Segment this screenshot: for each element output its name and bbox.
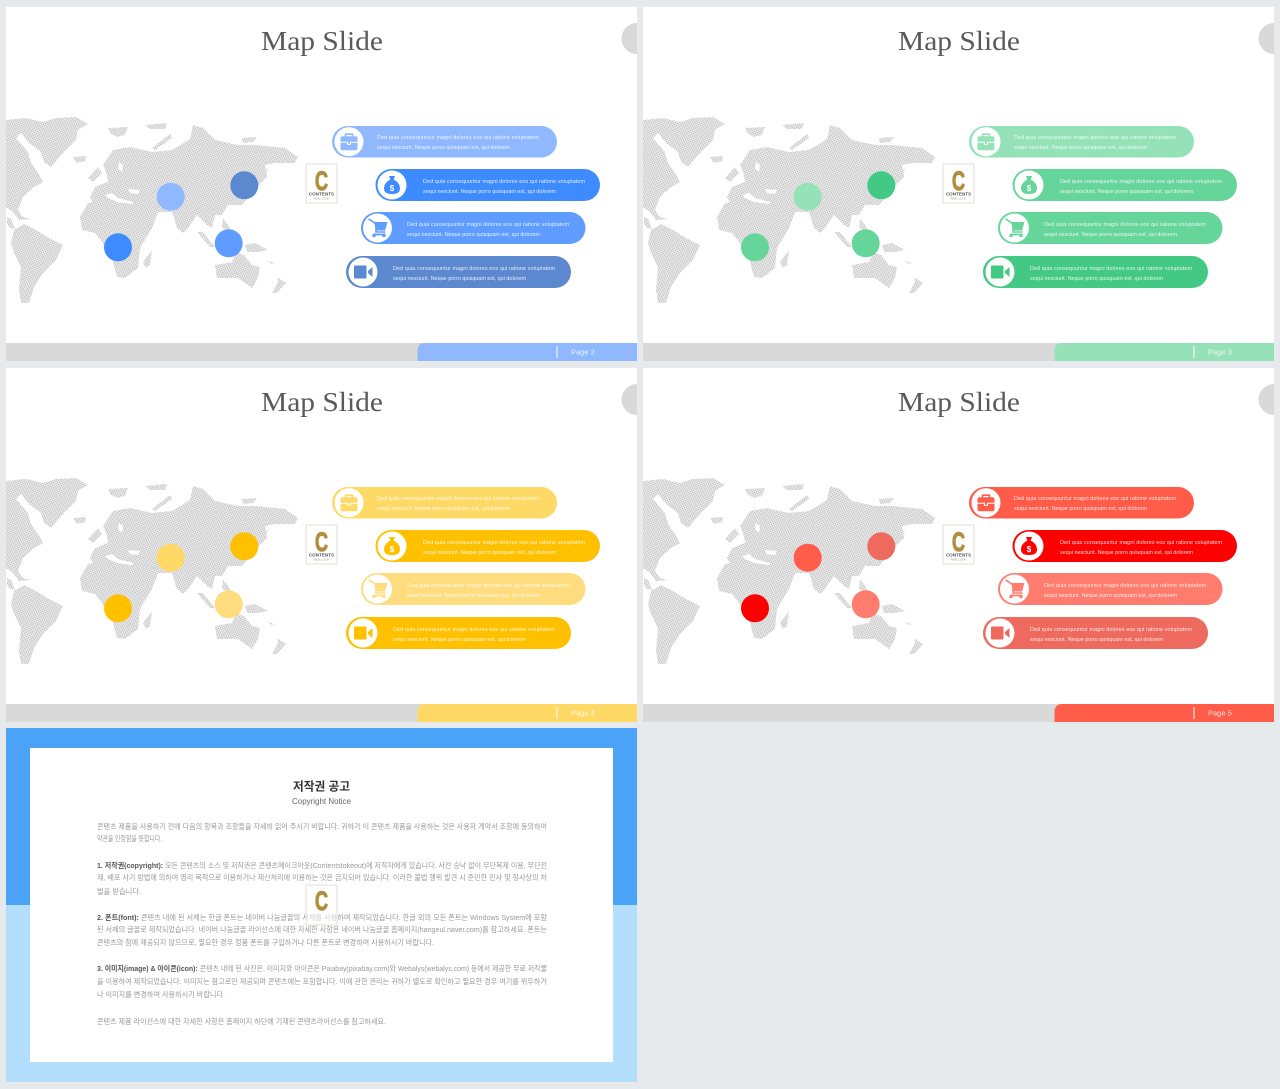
map markers — [741, 171, 895, 261]
font paragraph: 2. 폰트(font): 콘텐츠 내에 된 서체는 한글 폰트는 네이버 나눔글꼴의 서체를 사용하여 제작되었습니다. 한글 외의 모든 폰트는 Windows System에 포함 — [97, 912, 547, 922]
pill: cart — [998, 573, 1222, 605]
dotted world map — [6, 117, 298, 303]
pill: money bag: sequi nesciunt. Neque porro quisquam est, qui dolorem — [423, 550, 556, 556]
title: Map Slide — [898, 25, 1020, 56]
pill: cart — [361, 573, 586, 605]
pill: money bag: Ded quia consequuntur magni dolores eos qui ratione voluptatem — [423, 179, 586, 185]
logo — [943, 525, 974, 564]
logo: REAL LOOK — [951, 196, 967, 200]
pill: video camera: Ded quia consequuntur magni dolores eos qui ratione voluptatem — [393, 266, 556, 272]
pill: briefcase — [332, 487, 557, 518]
map markers — [104, 171, 258, 261]
intro paragraph — [97, 821, 547, 843]
pill: money bag: sequi nesciunt. Neque porro quisquam est, qui dolorem — [423, 189, 556, 195]
pill: briefcase: Ded quia consequuntur magni dolores eos qui ratione voluptatem — [1014, 135, 1176, 141]
pill: cart — [361, 212, 586, 244]
pill: cart: sequi nesciunt. Neque porro quisquam est, qui dolorem — [407, 232, 540, 238]
font paragraph: 된 서체의 글꼴로 제작되었습니다. 네이버 나눔글꼴 라이선스에 대한 자세한 사항은 네이버 나눔글꼴 홈페이지(hangeul.naver.com)를 참고하세요. 폰트는 — [97, 924, 547, 934]
dotted world map — [643, 117, 935, 303]
pill: money bag — [1012, 530, 1237, 562]
image paragraph: 을 이용하여 제작되었습니다. 이미지는 참고로만 제공되며 콘텐츠에는 포함합니다. 이에 관한 권리는 귀하가 별도로 확인하고 필요한 경우 여기를 위두하거 — [97, 976, 547, 986]
pill: money bag: $ — [390, 184, 395, 193]
pill: briefcase: sequi nesciunt. Neque porro quisquam est, qui dolorem — [377, 145, 510, 151]
copyright paragraph: 제, 배포 사기 방법에 의하여 영리 목적으로 이용하거나 재산처리에 이용하는 것은 금지되어 있습니다. 이러한 불법 행위 발견 시 준민한 민사 및 형사상의 처 — [97, 872, 547, 882]
pill: briefcase: Ded quia consequuntur magni dolores eos qui ratione voluptatem — [1014, 496, 1176, 502]
panel: copyright notice — [6, 728, 637, 1082]
pill: video camera — [983, 256, 1208, 288]
pill: money bag — [376, 169, 600, 201]
pill: video camera — [983, 617, 1208, 649]
pill: briefcase — [332, 126, 557, 158]
title: Map Slide — [261, 386, 383, 417]
footer bar: Page 4 — [571, 708, 595, 718]
pill: video camera: sequi nesciunt. Neque porro quisquam est, qui dolorem — [393, 637, 526, 643]
logo: REAL LOOK — [314, 196, 330, 200]
font paragraph — [97, 912, 547, 947]
watermark logo: C — [315, 886, 328, 916]
panel: green map slide — [643, 7, 1274, 361]
title: Map Slide — [261, 25, 383, 56]
corner tab — [1258, 384, 1274, 415]
pill: video camera: sequi nesciunt. Neque porro quisquam est, qui dolorem — [1030, 276, 1164, 282]
copyright paragraph: 1. 저작권(copyright): 모든 콘텐츠의 소스 및 저작권은 콘텐츠메이크아웃(Contentstokeout)에 저작자에게 있습니다. 사전 승낙 없이 무단복제 이용, 무단전 — [97, 860, 547, 870]
pill: video camera — [346, 617, 571, 649]
corner tab — [621, 23, 637, 54]
map markers — [741, 532, 895, 622]
logo — [306, 164, 337, 203]
pill: briefcase — [969, 126, 1194, 158]
map markers — [104, 532, 258, 622]
logo — [306, 525, 337, 564]
copyright paragraph — [97, 860, 547, 896]
pill: cart: sequi nesciunt. Neque porro quisquam est, qui dolorem — [407, 593, 540, 599]
notice subheading: Copyright Notice — [292, 796, 351, 806]
watermark logo — [306, 885, 337, 925]
pill: video camera: Ded quia consequuntur magni dolores eos qui ratione voluptatem — [1030, 266, 1192, 272]
footer bar — [6, 704, 637, 722]
pill: briefcase: sequi nesciunt. Neque porro quisquam est, qui dolorem — [1014, 145, 1148, 151]
pill: video camera: sequi nesciunt. Neque porro quisquam est, qui dolorem — [393, 276, 526, 282]
logo: C — [315, 166, 328, 196]
corner tab — [621, 384, 637, 415]
pill: money bag: Ded quia consequuntur magni dolores eos qui ratione voluptatem — [423, 540, 586, 546]
pill: cart — [998, 212, 1222, 244]
logo: REAL LOOK — [951, 558, 967, 562]
panel: yellow map slide — [6, 368, 637, 722]
logo: CONTENTS — [946, 552, 971, 558]
pill: video camera: sequi nesciunt. Neque porro quisquam est, qui dolorem — [1030, 637, 1164, 643]
pill: video camera: Ded quia consequuntur magni dolores eos qui ratione voluptatem — [393, 627, 556, 633]
footer bar: Page 3 — [1208, 348, 1232, 356]
pill: money bag: $ — [1027, 545, 1032, 554]
pill: briefcase: Ded quia consequuntur magni dolores eos qui ratione voluptatem — [377, 135, 540, 141]
notice heading: 저작권 공고 — [293, 778, 350, 794]
panel: blue map slide — [6, 7, 637, 361]
pill: cart: Ded quia consequuntur magni dolores eos qui ratione voluptatem — [1044, 222, 1206, 228]
footer bar — [6, 343, 637, 361]
pill: video camera — [346, 256, 571, 288]
copyright paragraph: 벌을 받습니다. — [97, 886, 141, 896]
logo: CONTENTS — [309, 552, 334, 558]
image paragraph — [97, 963, 547, 999]
pill: cart: Ded quia consequuntur magni dolores eos qui ratione voluptatem — [1044, 583, 1206, 589]
pill: money bag — [1012, 169, 1237, 201]
logo: CONTENTS — [946, 192, 971, 196]
logo: C — [315, 527, 328, 557]
pill: cart: sequi nesciunt. Neque porro quisquam est, qui dolorem — [1044, 593, 1178, 599]
pill: cart: Ded quia consequuntur magni dolores eos qui ratione voluptatem — [407, 222, 570, 228]
font paragraph: 콘텐츠의 첨에 제공되지 않으므로, 필요한 경우 정품 폰트를 구입하거나 다른 폰트로 변경하여 사용하시기 바랍니다. — [97, 937, 434, 947]
pill: video camera: Ded quia consequuntur magni dolores eos qui ratione voluptatem — [1030, 627, 1192, 633]
logo: REAL LOOK — [314, 558, 330, 562]
dotted world map — [6, 478, 298, 664]
pill: money bag: $ — [1027, 184, 1032, 193]
footer bar — [643, 343, 1274, 361]
footer bar: Page 5 — [1208, 708, 1232, 718]
logo — [943, 164, 974, 203]
pill: money bag: Ded quia consequuntur magni dolores eos qui ratione voluptatem — [1060, 540, 1222, 546]
pill: money bag: sequi nesciunt. Neque porro quisquam est, qui dolorem — [1060, 550, 1194, 556]
logo: C — [952, 527, 965, 557]
footer bar — [643, 704, 1274, 722]
pill: money bag: Ded quia consequuntur magni dolores eos qui ratione voluptatem — [1060, 179, 1222, 185]
pill: money bag — [376, 530, 600, 562]
panel: red map slide — [643, 368, 1274, 722]
pill: briefcase: sequi nesciunt. Neque porro quisquam est, qui dolorem — [1014, 506, 1148, 512]
logo: CONTENTS — [309, 192, 334, 196]
pill: briefcase: Ded quia consequuntur magni dolores eos qui ratione voluptatem — [377, 496, 540, 502]
pill: cart: Ded quia consequuntur magni dolores eos qui ratione voluptatem — [407, 583, 570, 589]
pill: money bag: $ — [390, 545, 395, 554]
image paragraph: 나 이미지를 변경하여 사용하시기 바랍니다. — [97, 989, 225, 999]
pill: money bag: sequi nesciunt. Neque porro quisquam est, qui dolorem — [1060, 189, 1194, 195]
intro paragraph: 약관을 인정함을 뜻합니다. — [97, 833, 162, 843]
pill: cart: sequi nesciunt. Neque porro quisquam est, qui dolorem — [1044, 232, 1178, 238]
pill: briefcase — [969, 487, 1194, 518]
intro paragraph: 콘텐츠 제품을 사용하기 전에 다음의 항목과 조항들을 자세히 읽어 주시기 바랍니다. 귀하가 이 콘텐츠 제품을 사용하는 것은 사용자 계약서 조항에 동의하여 — [97, 821, 547, 831]
image paragraph: 3. 이미지(image) & 아이콘(icon): 콘텐츠 내에 된 사진은, 이미지와 아이콘은 Pixabay(pixabay.com)와 Webalys(webalys.com) 등에서 제공한 무료 저작물 — [97, 963, 547, 973]
license note: 콘텐츠 제품 라이선스에 대한 자세한 사항은 홈페이지 하단에 기재된 콘텐츠라이선스를 참고하세요. — [97, 1016, 386, 1026]
pill: briefcase: sequi nesciunt. Neque porro quisquam est, qui dolorem — [377, 506, 510, 512]
footer bar: Page 2 — [571, 348, 595, 356]
dotted world map — [643, 478, 935, 664]
title: Map Slide — [898, 386, 1020, 417]
corner tab — [1258, 23, 1274, 54]
logo: C — [952, 166, 965, 196]
